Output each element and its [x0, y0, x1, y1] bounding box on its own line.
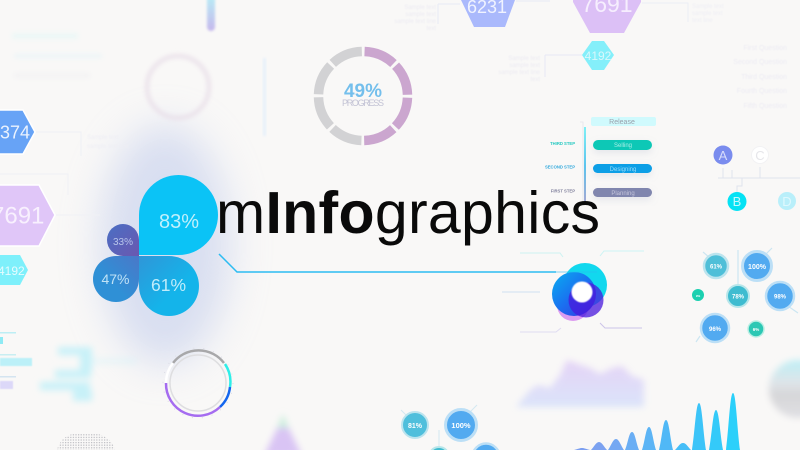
blurred bar chart: [40, 347, 137, 401]
timeline ABCD: A: [719, 148, 728, 163]
bubbles right: 61%: [710, 264, 723, 270]
bubble bottom partial: [429, 447, 449, 450]
bubble 96%: [701, 314, 729, 342]
steps chart: [545, 117, 656, 205]
steps chart: FIRST STEP: [551, 188, 575, 194]
bubbles right: 78%: [732, 294, 745, 300]
label 83%: 83%: [159, 211, 199, 233]
hexagon 6231: sample text: [405, 12, 436, 18]
blue glow behind petals: [100, 125, 230, 365]
circle C: [752, 146, 768, 164]
steps chart: Planning: [611, 191, 635, 197]
bubbles right: 98%: [774, 294, 787, 300]
label 61%: 61%: [151, 275, 186, 295]
hexagon 6231: text: [426, 26, 436, 32]
blurred top bar: [207, 0, 215, 31]
step 3: [593, 140, 652, 150]
blurred ring: [147, 56, 209, 118]
hexagon 4192 top: sample text: [509, 63, 540, 69]
bubbles right: 6%: [753, 327, 759, 332]
hexagon 4192 top: sample text line: [498, 70, 541, 76]
timeline ABCD: [714, 146, 800, 211]
circle D: [778, 192, 796, 210]
connector line: [219, 254, 556, 272]
progress value: 49%: [344, 81, 382, 102]
petal 33%: [107, 224, 139, 256]
petal 61%: [139, 256, 199, 316]
bubble bottom 81%: [402, 412, 428, 438]
list of options: First Question: [743, 45, 787, 52]
list of options: Fourth Question: [737, 88, 787, 95]
blurred top-left panel: [12, 33, 102, 78]
orb callout lines: [502, 251, 644, 332]
hexagon 374: sample text line: [87, 144, 129, 150]
ring gauge: [163, 348, 233, 418]
timeline ABCD: D: [782, 194, 792, 209]
blurred triangle: [264, 414, 302, 450]
circle A: [714, 146, 732, 164]
steps chart: Release: [609, 119, 635, 126]
list of options: [733, 45, 787, 110]
hexagon 7691 top: text line: [692, 18, 713, 24]
petal chart: [93, 175, 218, 316]
label 33%: 33%: [113, 237, 133, 248]
steps chart: Designing: [610, 167, 636, 173]
dot pattern: [57, 433, 115, 450]
bubble 6%: [748, 321, 764, 337]
hexagon 7691 top: sample text: [692, 11, 723, 17]
bubble bottom 100%: [446, 410, 476, 440]
bubble 98%: [766, 282, 794, 310]
blurred left bars: [0, 332, 32, 389]
steps chart: Selling: [614, 143, 632, 149]
petal 47%: [93, 256, 139, 302]
bubbles bottom: 81%: [408, 423, 423, 430]
bubble 78%: [727, 285, 749, 307]
bubble 61%: [704, 254, 728, 278]
blurred gauge bottom right: [769, 360, 800, 418]
steps chart: SECOND STEP: [545, 164, 575, 170]
hexagon 7691 left: [0, 174, 100, 246]
hexagon 4192 top: 4192: [585, 49, 612, 63]
hexagon 6231: sample text line: [394, 19, 437, 25]
list of options: Second Question: [733, 59, 787, 66]
vertical bar: [584, 127, 586, 205]
hexagon 374: [0, 110, 129, 156]
timeline ABCD: B: [733, 194, 741, 209]
label 47%: 47%: [101, 271, 130, 287]
hexagon 4192 top: text: [530, 77, 540, 83]
progress label: PROGRESS: [342, 98, 384, 108]
bubbles bottom: [401, 405, 500, 450]
hexagon 4192 left: [0, 255, 28, 285]
release header: [591, 117, 656, 126]
bubble small teal: [692, 289, 704, 301]
blurred area chart: [516, 360, 644, 407]
list of options: Third Question: [741, 74, 787, 81]
hexagon 6231: [394, 0, 550, 32]
bubble 100%: [742, 252, 772, 280]
bubbles right: 9%: [696, 294, 700, 298]
circle B: [728, 192, 746, 211]
step 2: [593, 164, 652, 173]
bubbles bottom: 100%: [451, 421, 471, 430]
timeline ABCD: C: [755, 148, 765, 163]
hexagon 7691 top: Sample text: [692, 4, 724, 10]
hexagon 6231: Sample text: [404, 5, 436, 11]
list of options: Fifth Question: [743, 103, 787, 110]
blurred vertical bar: [263, 58, 266, 136]
hexagon 4192 top: [498, 41, 614, 83]
bubbles right: 100%: [748, 264, 767, 271]
orb icon: [552, 263, 607, 321]
hexagon 7691 top: [573, 0, 724, 33]
bubbles right: 96%: [709, 327, 722, 333]
bubbles right: [692, 248, 798, 342]
hexagon 4192 top: Sample text: [508, 56, 540, 62]
hexagon 374: 374: [0, 122, 30, 142]
spike chart: [574, 393, 740, 450]
step 1: [593, 188, 652, 197]
hexagon 374: Sample text: [87, 135, 119, 141]
progress donut: [317, 50, 409, 142]
petal 83%: [139, 175, 218, 255]
title: mInfographics: [216, 180, 600, 246]
steps chart: THIRD STEP: [550, 141, 575, 146]
